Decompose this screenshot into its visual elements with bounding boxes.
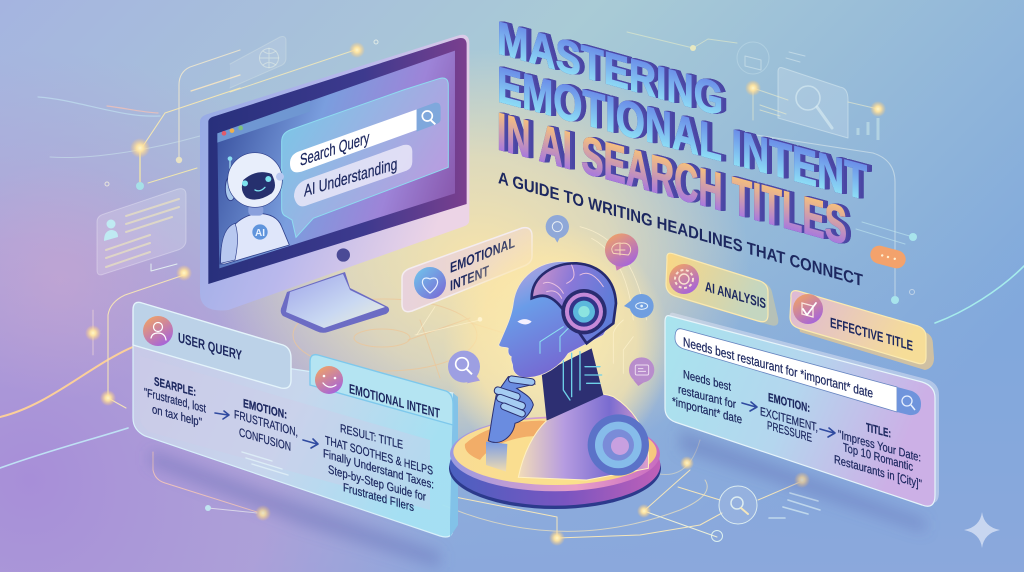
result text: RESULT: TITLE <box>340 421 403 452</box>
glowing nodes left <box>85 138 271 521</box>
main title: MASTERING <box>497 12 723 126</box>
arrow <box>742 402 757 411</box>
headset rings <box>561 289 607 334</box>
head <box>499 262 615 377</box>
node: top centre <box>349 42 365 58</box>
emotion text: CONFUSION <box>239 425 291 454</box>
user query header <box>133 302 291 388</box>
chat bubble <box>282 78 448 237</box>
browser toolbar <box>217 101 310 143</box>
query text: restaurant for <box>678 382 736 411</box>
icon: eye bubble <box>624 294 654 318</box>
sparkle icon <box>964 512 1000 548</box>
search query bar: Search Query <box>300 128 370 170</box>
emotion text: FRUSTRATION, <box>234 407 298 439</box>
torso <box>518 393 649 480</box>
user query header: USER QUERY <box>178 330 242 364</box>
panel shadows <box>150 430 925 568</box>
result text <box>323 421 434 514</box>
query text: *important* date <box>672 394 742 427</box>
glowing nodes top right <box>690 45 917 304</box>
title text: "Impress Your Date: <box>838 427 921 465</box>
title text: Top 10 Romantic <box>843 440 913 474</box>
emotional intent badge: EMOTIONAL <box>450 234 515 277</box>
example query text: on tax help" <box>152 402 202 429</box>
robot hand <box>486 375 535 472</box>
title text: Restaurants in [City]" <box>834 452 922 491</box>
emotional intent badge <box>402 228 532 312</box>
emotion text: EMOTION: <box>243 396 287 422</box>
right panel: example flow <box>665 313 939 506</box>
main title: EMOTIONAL INTENT <box>497 56 867 211</box>
header: AI analysis: AI ANALYSIS <box>705 279 766 312</box>
title text: TITLE: <box>866 420 891 441</box>
search bar: Needs best restaurant for *important* date <box>683 334 873 401</box>
main title <box>497 12 867 257</box>
example query text: SEARPLE: <box>154 374 196 399</box>
glowing nodes lower <box>549 456 810 546</box>
arrow <box>303 439 318 448</box>
monitor <box>200 35 469 310</box>
emotion text: PRESSURE <box>767 418 812 445</box>
floating profile card <box>97 189 186 275</box>
floating globe card <box>230 36 378 92</box>
panel body <box>669 313 939 503</box>
header: effective title <box>790 291 934 370</box>
left circuit lines and glowing nodes <box>0 50 257 513</box>
panel body <box>133 345 453 537</box>
subtitle: A GUIDE TO WRITING HEADLINES THAT CONNECT <box>498 167 863 290</box>
monitor stand <box>281 272 389 333</box>
emotional intent header: EMOTIONAL INTENT <box>349 381 440 421</box>
emotion text: EMOTION: <box>768 390 810 415</box>
arrow <box>820 428 835 437</box>
arcs beneath monitor <box>293 299 510 378</box>
query text: Needs best <box>683 367 731 394</box>
neck <box>542 348 603 421</box>
chat pill icon <box>868 244 908 270</box>
left panel: user query and emotional intent flow <box>133 302 458 537</box>
emotion text: EXCITEMENT, <box>760 404 818 435</box>
result text: THAT SOOTHES & HELPS <box>325 433 433 478</box>
icon: message bubble <box>629 357 654 386</box>
emotional intent badge: INTENT <box>450 263 490 295</box>
title text <box>834 420 922 491</box>
emotion text <box>234 396 298 454</box>
result text: Frustrated FIlers <box>343 480 414 514</box>
header: effective title: EFFECTIVE TITLE <box>830 315 913 355</box>
example query text: "Frustrated, lost <box>144 385 206 416</box>
top right decorative icons and lines <box>627 32 914 300</box>
result text: Step-by-Step Guide for <box>328 462 426 504</box>
icon: search bubble <box>448 351 480 383</box>
icon: brain bubble <box>605 233 638 271</box>
AI understanding bar: AI Understanding <box>304 154 397 201</box>
header: AI analysis <box>666 253 778 326</box>
brain cap <box>532 263 616 343</box>
emotional intent header <box>310 355 453 425</box>
central AI figure on platform <box>415 215 670 509</box>
example query text <box>144 374 206 429</box>
shoulder joint <box>588 414 649 476</box>
robot avatar: AI <box>255 228 265 239</box>
arrow <box>215 411 229 419</box>
robot avatar <box>220 153 289 264</box>
lower circuit lines <box>443 440 820 542</box>
browser window <box>217 51 455 268</box>
icon: target bubble <box>546 215 569 243</box>
result text: Finally Understand Taxes: <box>323 446 434 492</box>
emotion text <box>760 390 818 445</box>
search query bar <box>290 103 441 172</box>
query text <box>672 367 742 427</box>
platform <box>449 417 661 509</box>
teal wave <box>935 266 1024 323</box>
